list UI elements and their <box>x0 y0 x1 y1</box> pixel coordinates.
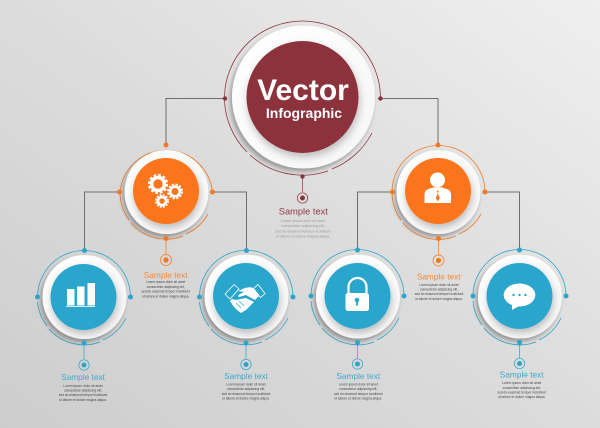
caption: Lorem ipsum dolor sit amet <box>63 384 103 388</box>
caption: Sample text <box>224 371 269 381</box>
subtitle: Infographic <box>266 105 342 121</box>
caption: Sample text <box>336 371 381 381</box>
icon: handshake <box>225 284 265 313</box>
caption <box>59 372 107 402</box>
caption: sed do eiusmod tempor incididunt <box>415 292 463 296</box>
disc <box>478 254 562 338</box>
caption: ut labore et dolore magna aliqua. <box>59 398 107 402</box>
caption: ut labore et dolore magna aliqua. <box>222 396 270 400</box>
orange circle <box>133 158 199 224</box>
ring <box>38 250 130 345</box>
stem and marker <box>352 344 363 369</box>
caption: consectetur adipiscing elit, <box>227 387 265 391</box>
caption <box>497 370 546 399</box>
joints <box>117 142 215 241</box>
ring <box>120 150 212 239</box>
node: lock <box>308 248 406 400</box>
caption: sed do eiusmod tempor incididunt <box>222 392 270 396</box>
caption: sed do eiusmod tempor incididunt <box>497 390 546 394</box>
central caption: sed do eiusmod tempor incididunt <box>275 229 331 233</box>
caption: Lorem ipsum dolor sit amet <box>226 382 266 386</box>
disc <box>316 254 400 338</box>
icon: gears <box>149 175 182 207</box>
ring <box>392 146 485 239</box>
icon: person <box>424 172 451 203</box>
caption: Sample text <box>144 270 188 280</box>
caption <box>222 371 270 400</box>
caption: Lorem ipsum dolor sit amet <box>502 381 541 385</box>
caption: Sample text <box>61 372 106 382</box>
ring <box>473 250 566 345</box>
blue circle <box>213 263 279 329</box>
central caption: Lorem ipsum dolor sit amet <box>281 219 325 223</box>
stem and marker <box>297 178 308 203</box>
central node <box>223 21 383 239</box>
stem and marker <box>241 345 251 370</box>
central caption: Sample text <box>279 206 328 216</box>
caption <box>415 272 463 301</box>
joints <box>470 248 568 345</box>
stem and marker <box>79 345 89 370</box>
caption: consectetur adipiscing elit, <box>64 388 102 392</box>
node: chat <box>470 248 568 399</box>
caption: ut labore et dolore magna aliqua. <box>335 396 382 400</box>
icon: chat bubble <box>504 284 535 310</box>
node: person <box>390 142 488 301</box>
central ring <box>224 21 380 175</box>
connector lines <box>84 98 520 250</box>
stem and marker <box>160 240 172 266</box>
caption: consectetur adipiscing elit, <box>503 386 541 390</box>
blue circle <box>324 263 390 329</box>
caption: consectetur adipiscing elit, <box>339 387 377 391</box>
joints <box>390 142 488 241</box>
caption: ut labore et dolore magna aliqua. <box>498 395 546 399</box>
disc <box>124 150 208 234</box>
disc <box>204 254 288 338</box>
icon: bar chart <box>66 283 95 307</box>
caption: Sample text <box>500 370 544 380</box>
ring <box>311 250 404 345</box>
central disc <box>232 26 375 168</box>
joints <box>197 248 296 346</box>
node: gears <box>117 142 215 298</box>
caption: sed do eiusmod tempor incididunt <box>59 393 107 397</box>
central caption <box>275 206 331 239</box>
caption: consectetur adipiscing elit, <box>147 285 185 289</box>
caption: Lorem ipsum dolor sit amet <box>419 283 459 287</box>
title: Vector <box>257 74 349 107</box>
caption: ut labore et dolore magna aliqua. <box>415 297 463 301</box>
disc <box>42 255 126 339</box>
stem and marker <box>514 344 525 369</box>
disc <box>396 150 480 234</box>
joints <box>308 248 406 345</box>
caption: consectetur adipiscing elit, <box>420 288 458 292</box>
caption: ut labore et dolore magna aliqua. <box>142 294 190 298</box>
caption: sed do eiusmod tempor incididunt <box>141 290 190 294</box>
caption <box>334 371 383 400</box>
ring <box>200 250 293 345</box>
caption: Sample text <box>417 272 461 282</box>
caption: Lorem ipsum dolor sit amet <box>339 382 378 386</box>
caption: Lorem ipsum dolor sit amet <box>146 280 185 284</box>
stem and marker <box>433 240 444 266</box>
central caption: consectetur adipiscing elit, <box>281 224 325 228</box>
blue circle <box>50 264 116 330</box>
node: handshake <box>197 248 296 400</box>
caption <box>141 270 190 298</box>
node: bar chart <box>35 248 133 402</box>
joints <box>35 248 133 346</box>
central caption: ut labore et dolore magna aliqua. <box>276 235 330 239</box>
caption: sed do eiusmod tempor incididunt <box>334 392 383 396</box>
icon: lock <box>346 278 369 311</box>
ring joints <box>223 96 383 179</box>
blue circle <box>486 263 552 329</box>
central red circle <box>246 41 358 153</box>
orange circle <box>405 158 471 224</box>
